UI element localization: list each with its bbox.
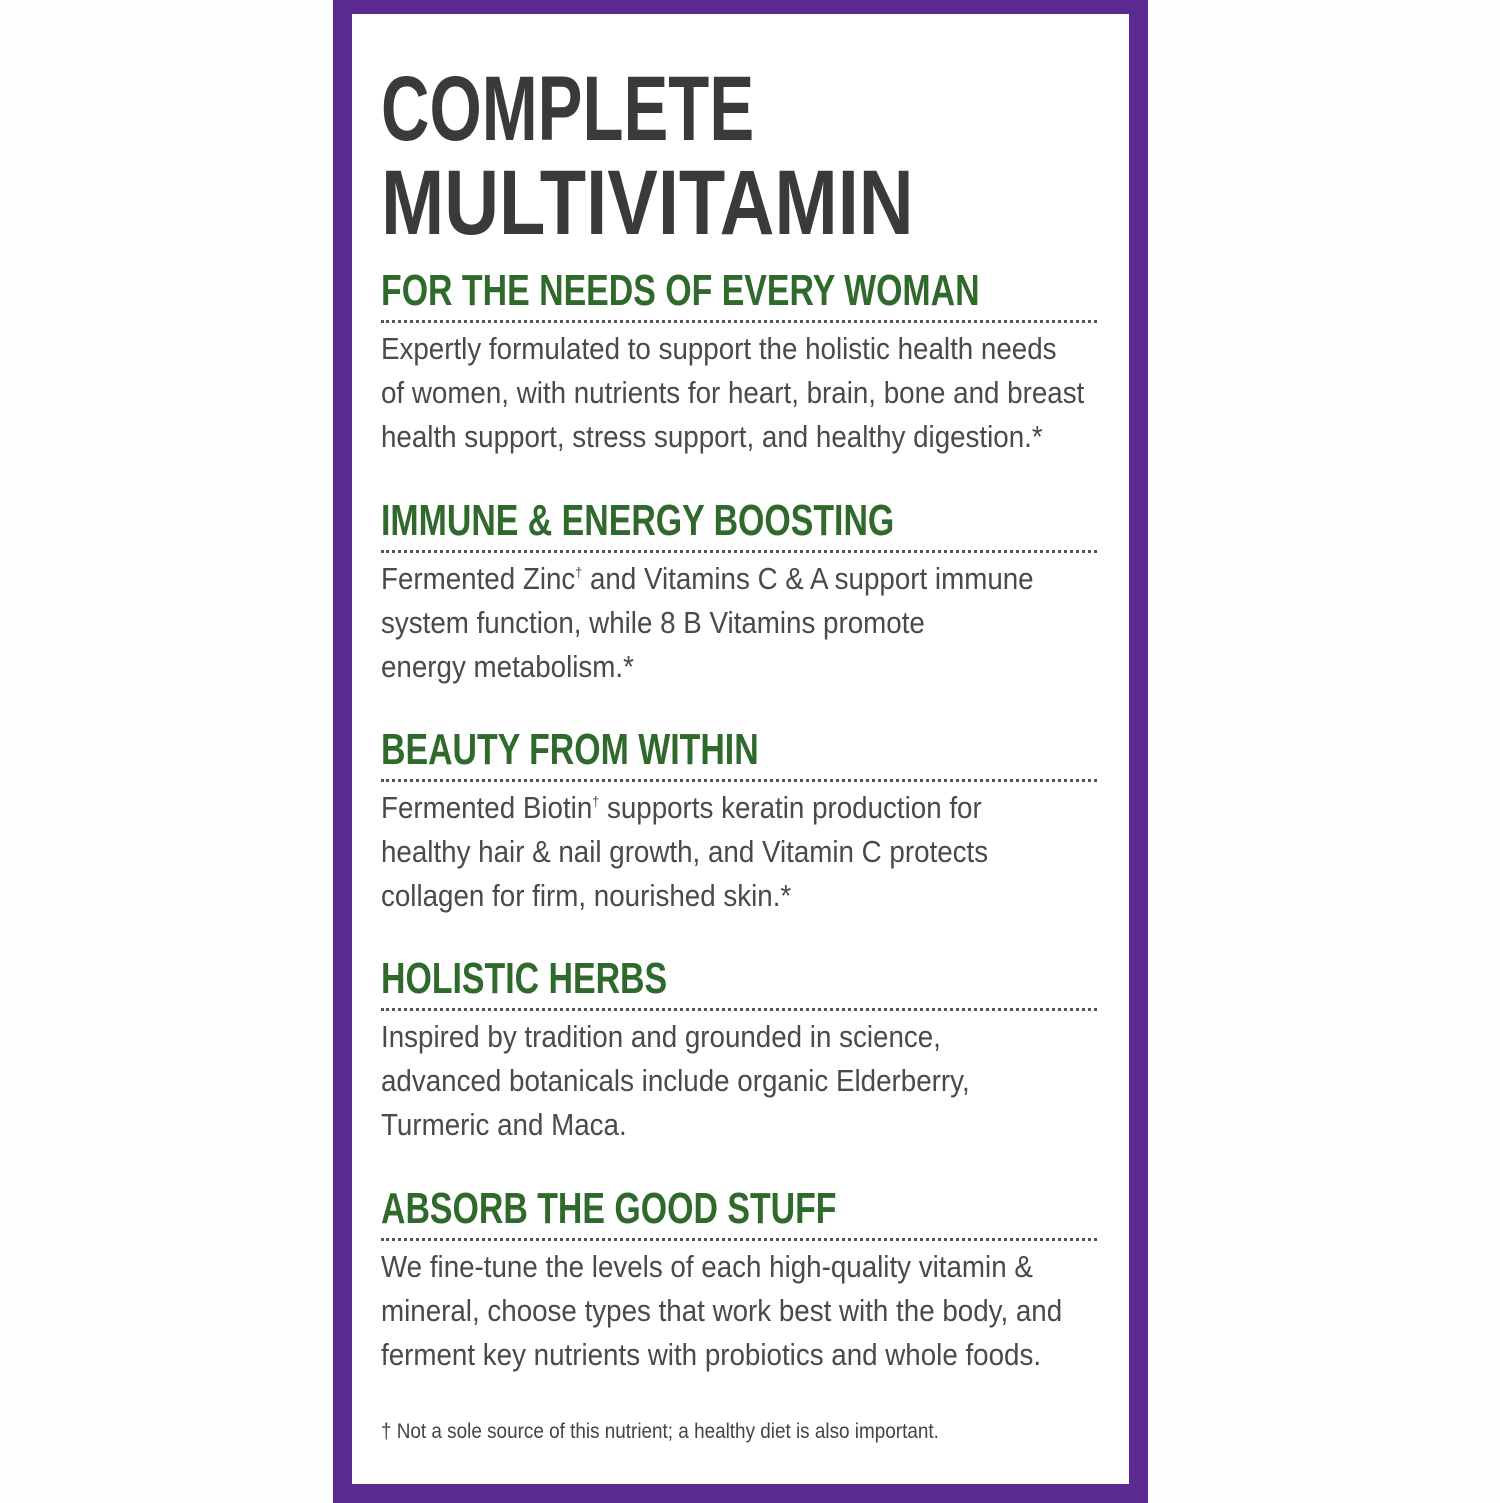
section: beauty: collagen for firm, nourished skin.*	[381, 878, 791, 913]
section: herbs: Turmeric and Maca.	[381, 1107, 627, 1142]
section: immune: energy metabolism.*	[381, 649, 634, 684]
section: beauty: BEAUTY FROM WITHIN	[381, 725, 759, 774]
section: herbs: Inspired by tradition and grounded in science,	[381, 1019, 941, 1054]
section: immune: system function, while 8 B Vitamins promote	[381, 605, 925, 640]
section: beauty	[381, 725, 1097, 913]
footnote: † Not a sole source of this nutrient; a healthy diet is also important.	[381, 1420, 939, 1443]
section: beauty: Fermented Biotin† supports keratin production for	[381, 790, 982, 825]
section: every woman: of women, with nutrients for heart, brain, bone and breast	[381, 375, 1084, 410]
section: every woman: Expertly formulated to support the holistic health needs	[381, 331, 1057, 366]
section: absorb: mineral, choose types that work best with the body, and	[381, 1293, 1062, 1328]
section: immune	[381, 496, 1097, 684]
purple frame panel	[333, 0, 1148, 1503]
section: herbs: HOLISTIC HERBS	[381, 954, 667, 1003]
section: every woman: health support, stress support, and healthy digestion.*	[381, 419, 1043, 454]
section: herbs: advanced botanicals include organic Elderberry,	[381, 1063, 970, 1098]
section: absorb: ferment key nutrients with probiotics and whole foods.	[381, 1337, 1041, 1372]
section: immune: IMMUNE & ENERGY BOOSTING	[381, 496, 894, 545]
section: absorb: We fine-tune the levels of each high-quality vitamin &	[381, 1249, 1033, 1284]
section: absorb: ABSORB THE GOOD STUFF	[381, 1184, 837, 1233]
section: absorb	[381, 1184, 1097, 1372]
section: herbs	[381, 954, 1097, 1142]
title	[381, 58, 914, 254]
section: every woman	[381, 266, 1097, 454]
section: beauty: healthy hair & nail growth, and Vitamin C protects	[381, 834, 988, 869]
section: every woman: FOR THE NEEDS OF EVERY WOMAN	[381, 266, 980, 315]
section: immune: Fermented Zinc† and Vitamins C & A support immune	[381, 561, 1034, 596]
title: MULTIVITAMIN	[381, 152, 914, 254]
title: COMPLETE	[381, 58, 754, 160]
